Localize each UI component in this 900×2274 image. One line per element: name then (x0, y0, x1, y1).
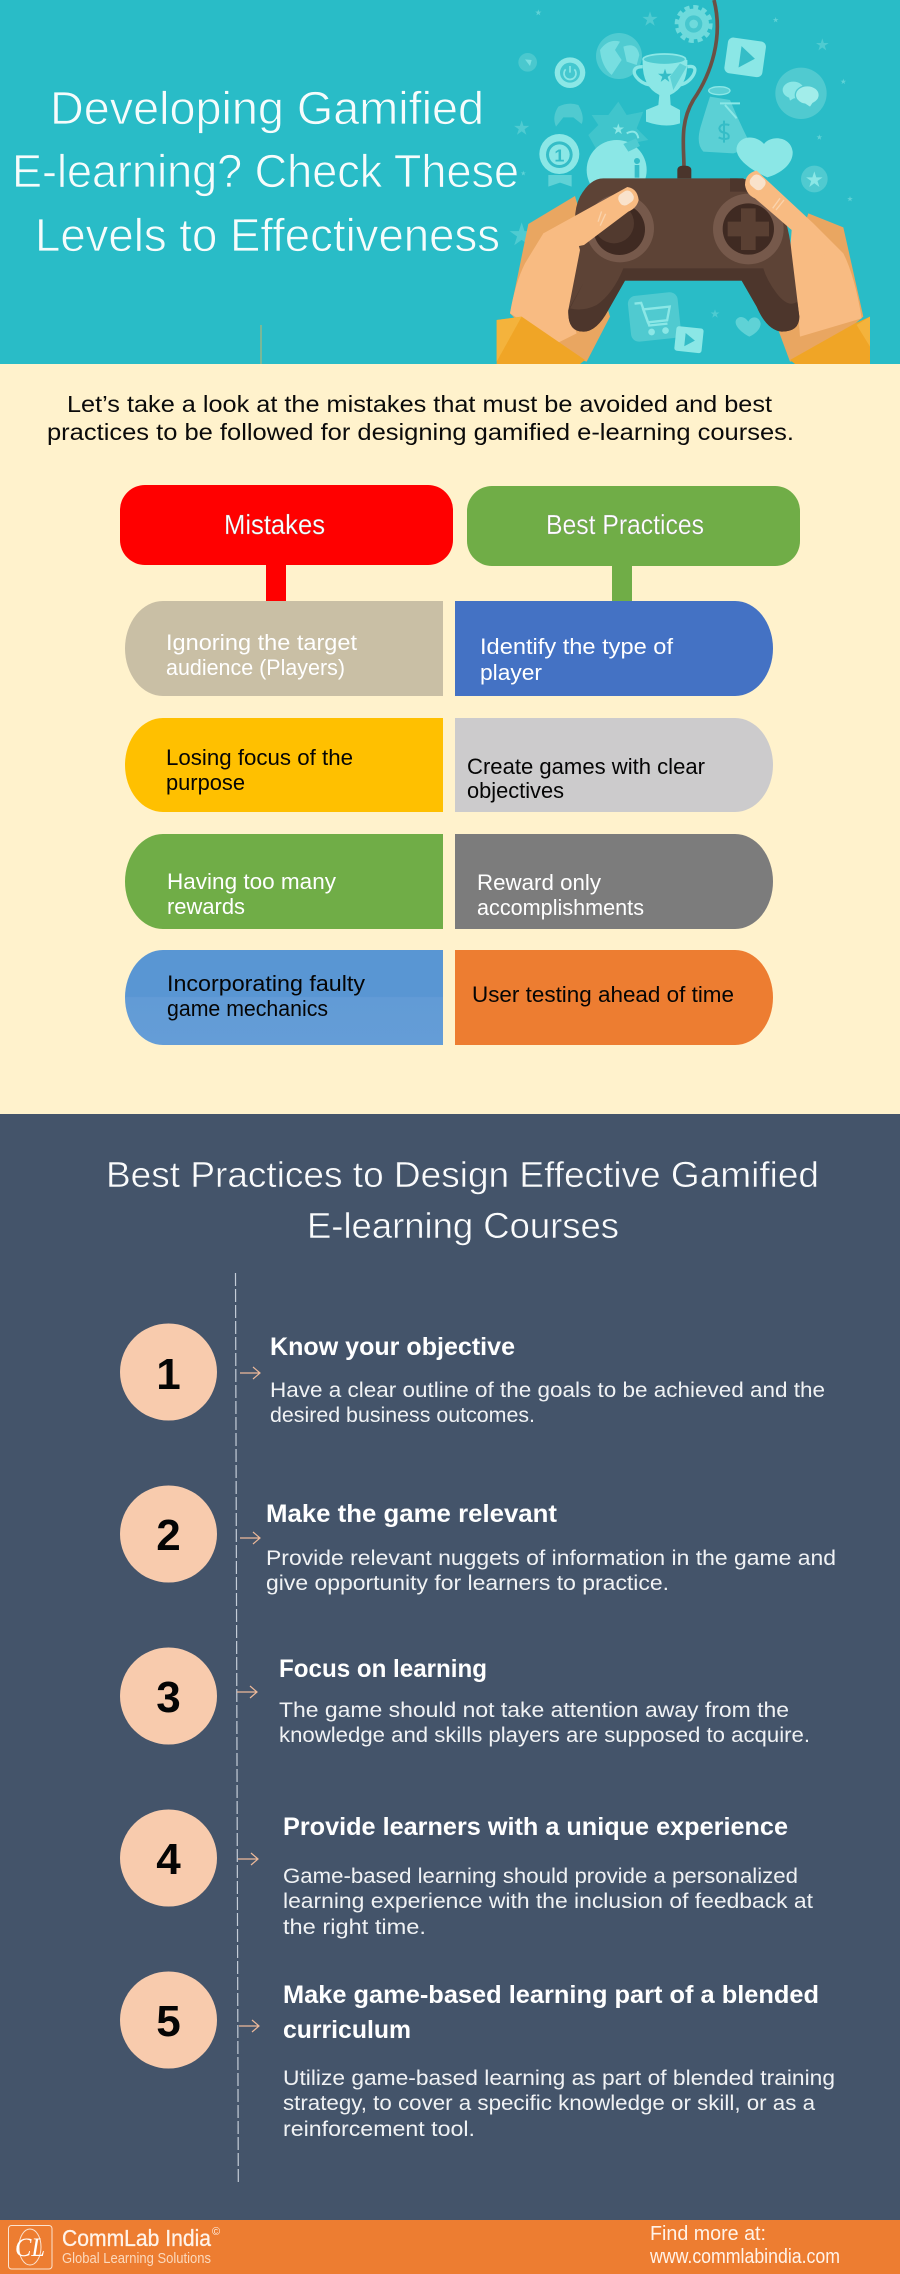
title (12, 82, 519, 261)
logo mark (8, 2226, 52, 2269)
icon: medal: 1 (554, 145, 564, 165)
step 4 text: the right time. (283, 1916, 426, 1939)
icon: heart (737, 138, 793, 177)
icon: cart tile (627, 291, 682, 342)
right thumb (745, 170, 814, 230)
logo text: © (212, 2226, 220, 2238)
heading: mistakes: Mistakes (224, 509, 325, 540)
step 3 text (279, 1655, 810, 1747)
step 1 text: Know your objective (270, 1333, 515, 1361)
practice 1: Identify the type of (480, 634, 674, 659)
mistake 3: rewards (167, 894, 245, 919)
step 1 text (270, 1333, 825, 1427)
arrow 4 (238, 1853, 258, 1865)
arrow 2 (240, 1532, 260, 1544)
step 3 text: knowledge and skills players are supposed to acquire. (279, 1724, 810, 1747)
step 4 (120, 1810, 813, 1939)
number badge 4 (120, 1810, 217, 1906)
icon: power button (555, 57, 585, 88)
icon: trophy (634, 54, 695, 125)
controller body (568, 178, 799, 332)
practice 3: accomplishments (477, 895, 644, 920)
number badge 5 (120, 1972, 217, 2068)
mistake 2 (125, 718, 443, 812)
step 4 text: Game-based learning should provide a personalized (283, 1865, 798, 1888)
icon: money bag (699, 87, 748, 153)
mistake 1: Ignoring the target (166, 630, 357, 655)
number badge 3 (120, 1648, 217, 1744)
mistake 4: game mechanics (167, 996, 328, 1021)
right cuff (790, 317, 870, 364)
mistake 2: Losing focus of the (166, 745, 353, 770)
mistake 3 (125, 834, 443, 929)
icon: burst behind bomb (588, 102, 648, 150)
left hand palm (510, 233, 587, 343)
icon: medal (539, 134, 579, 187)
step 2 text (266, 1500, 836, 1595)
intro text: Let’s take a look at the mistakes that must be avoided and best (67, 391, 773, 417)
arrow 3 (237, 1686, 257, 1698)
arrow 1 (240, 1367, 260, 1379)
practice 3 (455, 834, 773, 929)
number badge 2 (120, 1486, 217, 1582)
step 4 text (283, 1813, 813, 1939)
find more text: Find more at: (650, 2223, 766, 2245)
panel: footer (0, 2220, 900, 2274)
title: E-learning? Check These (12, 145, 519, 197)
logo text: CommLab India (62, 2225, 211, 2251)
icon: small round badge (518, 53, 537, 72)
step 5 (120, 1972, 835, 2141)
step 4 text: Provide learners with a unique experience (283, 1813, 788, 1841)
step 5 text: strategy, to cover a specific knowledge or skill, or as a (283, 2092, 815, 2115)
icon: small gamepad (554, 104, 583, 127)
logo text: Global Learning Solutions (62, 2250, 211, 2267)
step 5 text: reinforcement tool. (283, 2118, 475, 2141)
logo mark: CL (15, 2233, 45, 2262)
practice 1: player (480, 660, 542, 685)
intro text (47, 391, 794, 445)
practice 2 (455, 718, 773, 812)
panel: mistakes and best practices (0, 364, 900, 1114)
find more text (649, 2223, 840, 2268)
step 5 text: Utilize game-based learning as part of blended training (283, 2067, 835, 2090)
mistake 4: Incorporating faulty (167, 971, 365, 996)
step 1 text: desired business outcomes. (270, 1404, 535, 1427)
step 4 text: learning experience with the inclusion of feedback at (283, 1890, 813, 1913)
practice 3: Reward only (477, 870, 601, 895)
practice 4 (455, 950, 773, 1045)
panel: best practices to design (0, 1114, 900, 2220)
heading: best practices (467, 486, 800, 602)
cable (683, 0, 717, 168)
practice 2: objectives (467, 778, 564, 803)
step 5 text (283, 1981, 835, 2141)
right hand palm (788, 223, 862, 337)
practice 2: Create games with clear (467, 754, 705, 779)
icon: bomb (586, 124, 647, 184)
left thumb (544, 187, 639, 246)
heading: mistakes (120, 485, 453, 602)
icon: floating stars (510, 9, 853, 318)
icon: small play tile (674, 326, 704, 353)
section heading: E-learning Courses (307, 1205, 619, 1246)
practice 4: User testing ahead of time (472, 982, 734, 1007)
step 2 text: Make the game relevant (266, 1500, 558, 1528)
find more text: www.commlabindia.com (649, 2246, 840, 2268)
mistake 1 (125, 601, 443, 696)
icon: play tile (724, 37, 767, 78)
section heading (106, 1154, 819, 1246)
step 5 text: curriculum (283, 2016, 411, 2044)
mistake 1: audience (Players) (166, 655, 345, 680)
plug (677, 166, 691, 178)
step 1 text: Have a clear outline of the goals to be achieved and the (270, 1379, 825, 1402)
heading: best practices: Best Practices (546, 509, 704, 540)
number badge 1 (120, 1324, 217, 1420)
practice 1 (455, 601, 773, 696)
step 3 text: Focus on learning (279, 1655, 487, 1683)
mistake 4 (125, 950, 443, 1045)
mistake 2: purpose (166, 770, 245, 795)
step 3 text: The game should not take attention away from the (279, 1699, 789, 1722)
icon: gear (677, 7, 710, 41)
step 5 text: Make game-based learning part of a blended (283, 1981, 819, 2009)
arrow 5 (239, 2020, 259, 2032)
title: Levels to Effectiveness (35, 209, 500, 261)
step 1 (120, 1324, 825, 1427)
icon: globe (596, 33, 642, 79)
title: Developing Gamified (50, 82, 484, 134)
section heading: Best Practices to Design Effective Gamified (106, 1154, 819, 1195)
step 2 text: Provide relevant nuggets of information in the game and (266, 1547, 836, 1570)
step 2 text: give opportunity for learners to practice. (266, 1572, 669, 1595)
icon: star badge (801, 166, 828, 192)
hand backs (510, 196, 863, 362)
number badge 2: 2 (156, 1511, 181, 1560)
number badge 1: 1 (156, 1350, 181, 1399)
mistake 3: Having too many (167, 869, 336, 894)
icon: speech bubbles (775, 68, 827, 119)
number badge 5: 5 (156, 1997, 181, 2046)
panel: header banner (0, 0, 900, 364)
number badge 3: 3 (156, 1673, 181, 1722)
step 3 (120, 1648, 810, 1747)
intro text: practices to be followed for designing gamified e-learning courses. (47, 419, 794, 445)
icon: small heart (736, 317, 761, 337)
step 2 (120, 1486, 836, 1595)
number badge 4: 4 (156, 1835, 181, 1884)
logo text (62, 2225, 220, 2267)
left cuff (497, 317, 585, 364)
illustration: game controller with hands and icons (497, 0, 870, 364)
